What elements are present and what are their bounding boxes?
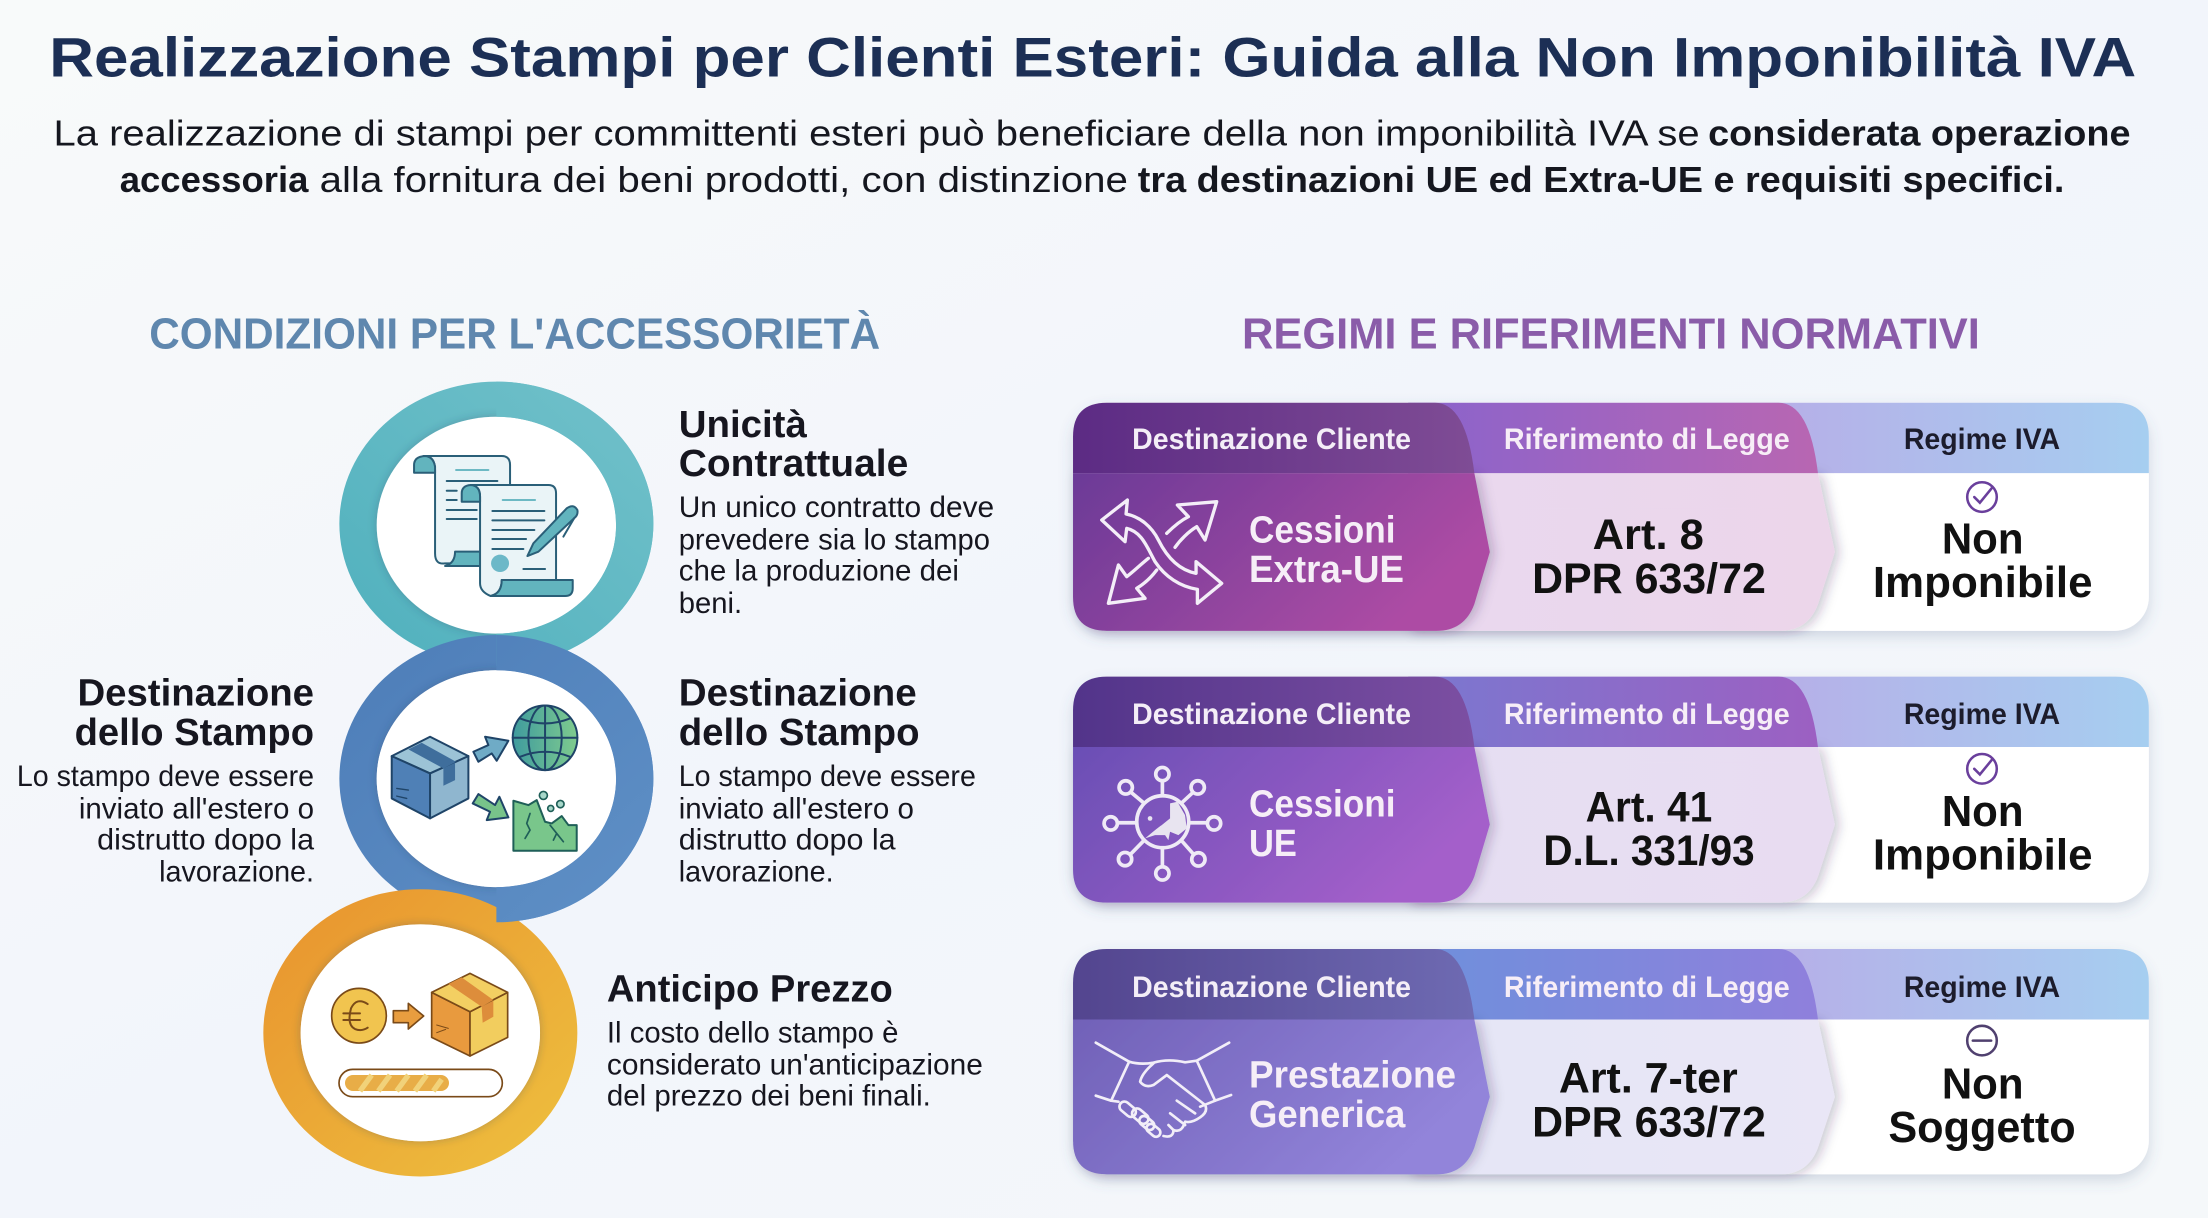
panel: cessioni ue: Regime IVA bbox=[1904, 698, 2060, 731]
text: destinazione dello stampo, left: lavorazione. bbox=[159, 856, 314, 889]
subtitle: tra destinazioni UE ed Extra-UE e requisiti specifici. bbox=[1138, 160, 2064, 200]
panel: cessioni ue: Non bbox=[1942, 787, 2024, 836]
panel: cessioni ue: Destinazione Cliente bbox=[1132, 698, 1411, 731]
panel: prestazione generica: Regime IVA bbox=[1904, 971, 2060, 1004]
icon: check bbox=[1967, 754, 1997, 784]
subtitle: alla fornitura dei beni prodotti, con distinzione bbox=[320, 160, 1128, 200]
icon: box to globe and destruction bbox=[392, 705, 577, 851]
interlocking rings bbox=[263, 382, 653, 1176]
text: destinazione dello stampo, left: Destinazione bbox=[77, 673, 314, 715]
panel: prestazione generica: Art. 7-ter bbox=[1559, 1055, 1738, 1102]
panel: cessioni extra-ue: Extra-UE bbox=[1249, 549, 1404, 591]
text: anticipo prezzo: del prezzo dei beni finali. bbox=[607, 1080, 931, 1113]
panel: cessioni ue bbox=[1073, 677, 2149, 903]
heading: condizioni: CONDIZIONI PER L'ACCESSORIETÀ bbox=[149, 309, 880, 359]
panel: cessioni extra-ue bbox=[1073, 403, 2149, 631]
text: destinazione dello stampo, left: inviato all'estero o bbox=[79, 792, 314, 825]
panel: prestazione generica: Prestazione bbox=[1249, 1054, 1456, 1096]
text: destinazione dello stampo, right: distrutto dopo la bbox=[679, 823, 896, 856]
text: destinazione dello stampo, left bbox=[17, 673, 315, 889]
panel: prestazione generica: Generica bbox=[1249, 1094, 1406, 1136]
subtitle: accessoria bbox=[120, 160, 309, 200]
subtitle bbox=[54, 114, 2131, 200]
text: anticipo prezzo: Anticipo Prezzo bbox=[607, 968, 893, 1010]
text: destinazione dello stampo, left: distrutto dopo la bbox=[97, 823, 315, 856]
text: unicità contrattuale bbox=[679, 404, 994, 620]
panel: cessioni extra-ue: Non bbox=[1942, 514, 2024, 563]
title: Realizzazione Stampi per Clienti Esteri: Guida alla Non Imponibilità IVA bbox=[49, 27, 2136, 89]
text: destinazione dello stampo, right: dello Stampo bbox=[679, 712, 920, 754]
text: unicità contrattuale: che la produzione dei bbox=[679, 554, 959, 587]
panel: cessioni extra-ue: DPR 633/72 bbox=[1532, 555, 1766, 602]
text: destinazione dello stampo, left: dello Stampo bbox=[75, 712, 314, 754]
panel: cessioni ue: Imponibile bbox=[1873, 830, 2093, 879]
panel: cessioni extra-ue: Imponibile bbox=[1873, 558, 2093, 607]
panel: prestazione generica bbox=[1073, 949, 2149, 1174]
icon: euro to box with progress bar bbox=[332, 973, 508, 1097]
heading: regimi: REGIMI E RIFERIMENTI NORMATIVI bbox=[1242, 310, 1980, 359]
text: destinazione dello stampo, right: lavorazione. bbox=[679, 856, 834, 889]
icon: handshake bbox=[1096, 1043, 1231, 1139]
text: destinazione dello stampo, right bbox=[679, 673, 976, 889]
text: unicità contrattuale: prevedere sia lo stampo bbox=[679, 523, 990, 556]
text: unicità contrattuale: Un unico contratto deve bbox=[679, 491, 994, 524]
panel: cessioni ue: Art. 41 bbox=[1586, 783, 1712, 830]
text: anticipo prezzo: Il costo dello stampo è bbox=[607, 1016, 898, 1049]
text: unicità contrattuale: Unicità bbox=[679, 404, 808, 446]
icon: eu network bbox=[1104, 767, 1221, 880]
text: anticipo prezzo bbox=[607, 968, 983, 1113]
text: destinazione dello stampo, right: inviato all'estero o bbox=[679, 792, 914, 825]
panel: cessioni ue: Riferimento di Legge bbox=[1504, 698, 1790, 731]
icon: minus bbox=[1967, 1026, 1997, 1055]
panel: cessioni ue: Cessioni bbox=[1249, 783, 1395, 825]
panel: cessioni ue: UE bbox=[1249, 823, 1297, 865]
text: destinazione dello stampo, left: Lo stampo deve essere bbox=[17, 760, 314, 793]
panel: prestazione generica: Soggetto bbox=[1888, 1103, 2076, 1152]
subtitle: La realizzazione di stampi per committenti esteri può beneficiare della non imponibilità IVA se bbox=[54, 114, 1700, 154]
text: destinazione dello stampo, right: Lo stampo deve essere bbox=[679, 760, 976, 793]
text: destinazione dello stampo, right: Destinazione bbox=[679, 673, 917, 715]
panel: cessioni extra-ue: Destinazione Cliente bbox=[1132, 423, 1411, 456]
panel: prestazione generica: Non bbox=[1942, 1059, 2024, 1108]
panel: cessioni extra-ue: Riferimento di Legge bbox=[1504, 423, 1790, 456]
text: unicità contrattuale: beni. bbox=[679, 587, 742, 620]
text: unicità contrattuale: Contrattuale bbox=[679, 443, 908, 485]
panel: prestazione generica: Riferimento di Legge bbox=[1504, 971, 1790, 1004]
icon: check bbox=[1967, 482, 1997, 512]
panel: cessioni extra-ue: Art. 8 bbox=[1593, 511, 1704, 558]
panel: prestazione generica: DPR 633/72 bbox=[1532, 1098, 1766, 1145]
panel: cessioni ue: D.L. 331/93 bbox=[1543, 827, 1755, 874]
icon: crossing arrows bbox=[1102, 500, 1222, 603]
panel: cessioni extra-ue: Regime IVA bbox=[1904, 423, 2060, 456]
panel: cessioni extra-ue: Cessioni bbox=[1249, 510, 1395, 552]
panel: prestazione generica: Destinazione Cliente bbox=[1132, 971, 1411, 1004]
icon: contract documents bbox=[414, 456, 578, 596]
subtitle: considerata operazione bbox=[1708, 114, 2131, 154]
text: anticipo prezzo: considerato un'anticipazione bbox=[607, 1049, 983, 1082]
